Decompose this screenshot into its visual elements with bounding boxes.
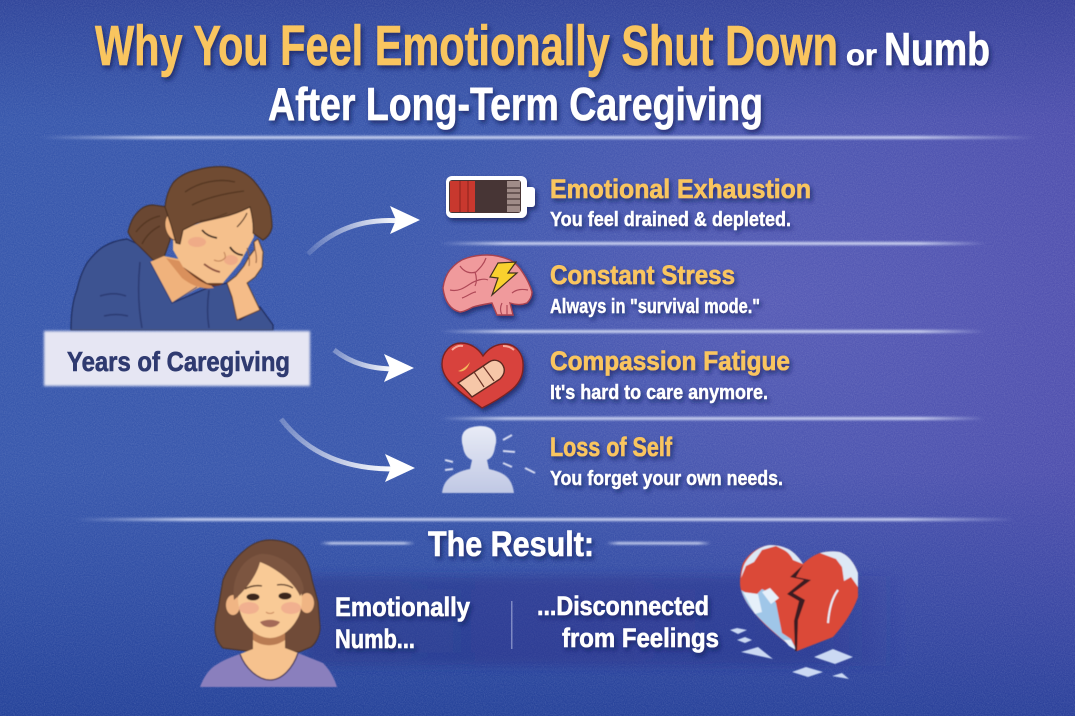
row 4 text	[550, 432, 783, 490]
face	[173, 205, 254, 283]
face	[238, 562, 302, 638]
icon: fading silhouette	[442, 426, 535, 493]
hand and arm	[227, 239, 263, 320]
row 2 text	[550, 260, 760, 318]
eyes and brows	[246, 594, 260, 600]
closed eyes	[202, 230, 243, 255]
result text: disconnected from feelings: from Feelings	[562, 623, 719, 653]
icon: broken frozen heart	[730, 545, 858, 679]
illustration: tired caregiver resting head on hand	[71, 167, 273, 330]
row 3 text	[550, 346, 790, 404]
title: After Long-Term Caregiving	[268, 78, 763, 130]
icon: bandaged heart	[442, 343, 523, 408]
neck and chest	[150, 256, 208, 303]
shirt	[200, 653, 337, 687]
row 2 text: Constant Stress	[550, 260, 735, 290]
title	[95, 14, 990, 130]
row 3 text: It's hard to care anymore.	[550, 382, 768, 404]
arrow: to emotional exhaustion	[308, 206, 420, 254]
arrow: to loss of self	[281, 419, 415, 482]
result band	[305, 576, 905, 666]
illustration: numb woman portrait	[200, 540, 337, 687]
row 1 text: Emotional Exhaustion	[550, 174, 811, 204]
result heading: The Result:	[428, 525, 594, 564]
fringe	[234, 554, 304, 600]
label: years of caregiving: Years of Caregiving	[67, 346, 290, 377]
hair	[165, 167, 272, 244]
row 3 text: Compassion Fatigue	[550, 346, 790, 376]
arrow: to compassion fatigue	[334, 350, 414, 382]
ear	[165, 212, 181, 240]
neck	[240, 630, 298, 680]
row 1 text: You feel drained & depleted.	[550, 209, 791, 231]
row 1 text	[550, 174, 811, 231]
ponytail	[128, 205, 170, 260]
title: or	[846, 39, 877, 72]
icon: low battery	[446, 176, 535, 218]
label: years of caregiving	[44, 331, 310, 386]
sweater	[71, 239, 273, 330]
row 4 text: You forget your own needs.	[550, 468, 783, 490]
icon: stressed brain	[443, 255, 532, 315]
cheeks, nose and mouth	[188, 237, 206, 247]
title: Numb	[884, 23, 990, 75]
ears	[226, 595, 240, 615]
result text: disconnected from feelings	[537, 591, 719, 653]
hair back	[215, 540, 320, 652]
cheeks, nose, mouth	[239, 602, 259, 614]
result text: emotionally numb: Emotionally	[335, 592, 470, 622]
row 2 text: Always in "survival mode."	[550, 296, 760, 318]
result text: emotionally numb: Numb...	[335, 624, 415, 654]
result text: disconnected from feelings: ...Disconnected	[537, 591, 709, 621]
row 4 text: Loss of Self	[550, 432, 673, 462]
result text: emotionally numb	[335, 592, 470, 654]
